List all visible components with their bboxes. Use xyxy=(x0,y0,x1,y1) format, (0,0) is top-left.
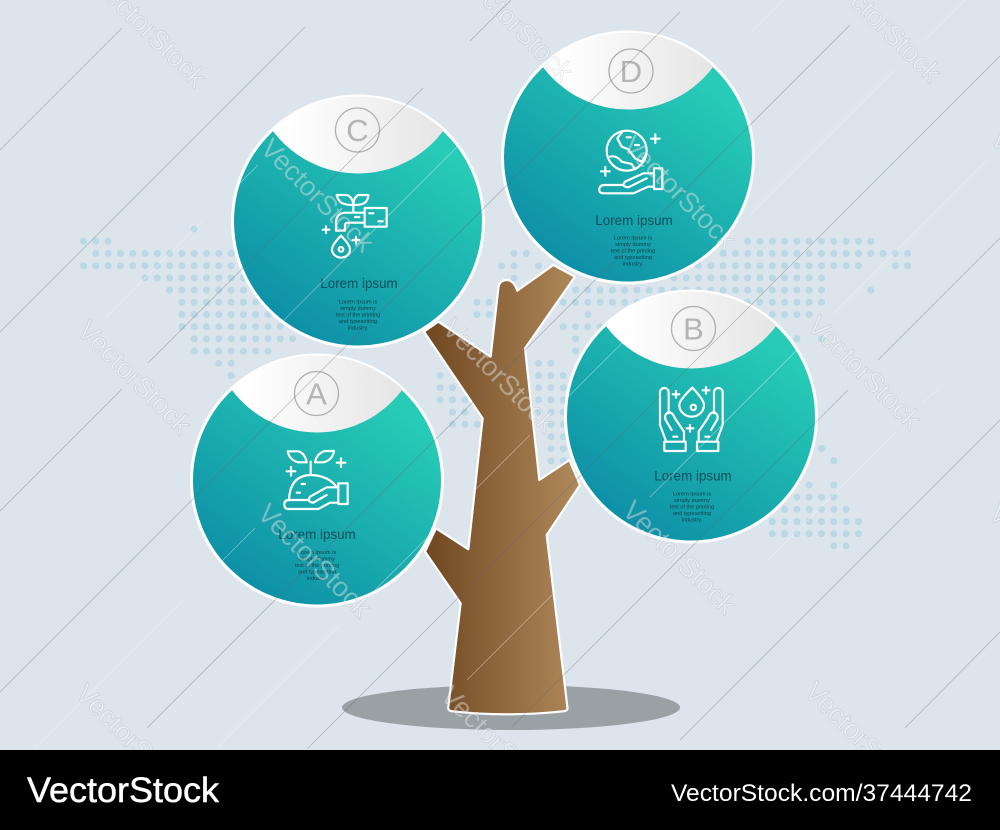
text block B: industry. xyxy=(682,518,703,524)
dotted world map xyxy=(84,229,908,546)
text block A: and typesetting xyxy=(298,570,336,576)
footer bar xyxy=(0,750,1000,830)
text block D: Lorem Ipsum is xyxy=(614,236,652,242)
heading B: Lorem ipsum xyxy=(654,468,732,484)
text block A: industry. xyxy=(307,576,328,582)
tree with ground shadow xyxy=(342,265,680,730)
badge C: C xyxy=(346,113,369,148)
heading D: Lorem ipsum xyxy=(595,213,673,228)
watermark text: VectorStock xyxy=(435,680,561,805)
text block C: text of the printing xyxy=(336,312,380,318)
heading A: Lorem ipsum xyxy=(278,527,356,542)
badge D xyxy=(609,49,653,93)
white cap B xyxy=(606,292,776,369)
text block C: simply dummy xyxy=(340,306,376,312)
footer image id: VectorStock.com/37444742 xyxy=(671,780,972,807)
badge B xyxy=(672,306,716,350)
watermark text: VectorStock xyxy=(72,315,198,440)
text block B: simply dummy xyxy=(674,498,710,504)
white cap C xyxy=(272,97,444,174)
icon: plant on hand xyxy=(284,451,348,509)
heading C: Lorem ipsum xyxy=(320,276,398,291)
text block C: Lorem Ipsum is xyxy=(339,300,377,306)
watermark text: VectorStock xyxy=(617,495,743,620)
watermark text: VectorStock xyxy=(802,310,928,435)
text block A: Lorem Ipsum is xyxy=(298,550,336,556)
text block A: simply dummy xyxy=(299,556,335,562)
text block D: and typesetting xyxy=(614,255,652,261)
watermark text: VectorStock xyxy=(437,313,563,438)
badge A: A xyxy=(306,376,327,412)
watermark text: VectorStock xyxy=(255,133,381,258)
icon: globe on hand xyxy=(599,131,662,193)
panel: D xyxy=(502,32,754,283)
white cap D xyxy=(542,33,714,110)
text block C: and typesetting xyxy=(339,319,377,325)
panel: B xyxy=(566,291,816,542)
badge C xyxy=(336,108,380,152)
footer logo: VectorStock xyxy=(27,770,219,810)
badge D: D xyxy=(620,54,642,89)
watermark text: VectorStock xyxy=(252,498,378,623)
badge B: B xyxy=(683,312,704,346)
panel: C xyxy=(232,96,484,347)
text block D: text of the printing xyxy=(611,248,655,254)
text block B: Lorem Ipsum is xyxy=(673,492,711,498)
badge A xyxy=(294,372,338,416)
text block B: text of the printing xyxy=(670,504,714,510)
watermark text: VectorStock xyxy=(70,678,196,803)
icon: faucet with plant and drop xyxy=(323,195,387,258)
watermark text: VectorStock xyxy=(617,130,743,255)
text block B: and typesetting xyxy=(673,511,711,517)
icon: hands with water drop xyxy=(660,387,723,451)
text block D: simply dummy xyxy=(615,242,651,248)
white cap A xyxy=(232,356,402,433)
text block D: industry. xyxy=(623,262,644,268)
panel: A xyxy=(192,355,442,606)
watermark text: VectorStock xyxy=(799,676,925,801)
tree trunk and branches xyxy=(424,265,580,714)
text block C: industry. xyxy=(348,326,369,332)
text block A: text of the printing xyxy=(295,563,339,569)
